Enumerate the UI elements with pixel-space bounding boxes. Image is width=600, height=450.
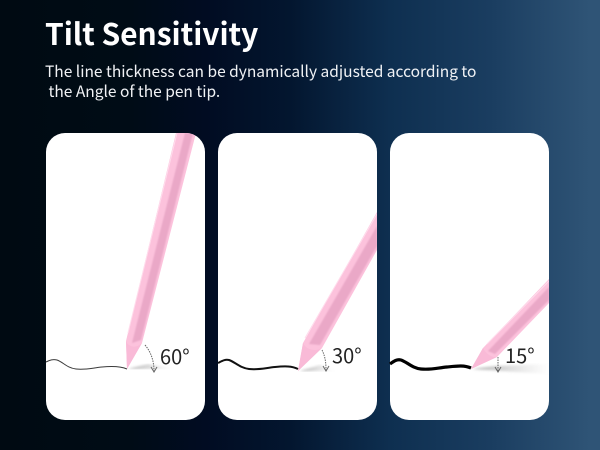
panel: 30 degree tilt (218, 133, 377, 420)
angle arrow (322, 350, 329, 371)
shadow under pen (128, 364, 175, 369)
thin ink line (46, 360, 127, 369)
pink pen at 15 degrees (471, 279, 549, 369)
label: 30 degrees: 30° (332, 340, 362, 369)
description text: the Angle of the pen tip. (48, 80, 220, 102)
label: 60 degrees: 60° (160, 341, 190, 370)
angle arrow (145, 345, 157, 372)
description text (45, 60, 476, 102)
thick ink line (390, 360, 471, 369)
shadow under pen (300, 365, 335, 371)
angle arrow (495, 357, 501, 372)
panel: 60 degree tilt (46, 133, 205, 420)
title: Tilt Sensitivity (45, 10, 258, 54)
medium ink line (218, 360, 298, 369)
panel: 15 degree tilt (390, 133, 549, 420)
label: 15 degrees: 15° (505, 340, 535, 369)
pink pen at 30 degrees (298, 212, 377, 371)
pink pen at 60 degrees (126, 133, 196, 369)
description text: The line thickness can be dynamically adjusted according to (45, 60, 476, 82)
shadow under pen (472, 364, 549, 374)
